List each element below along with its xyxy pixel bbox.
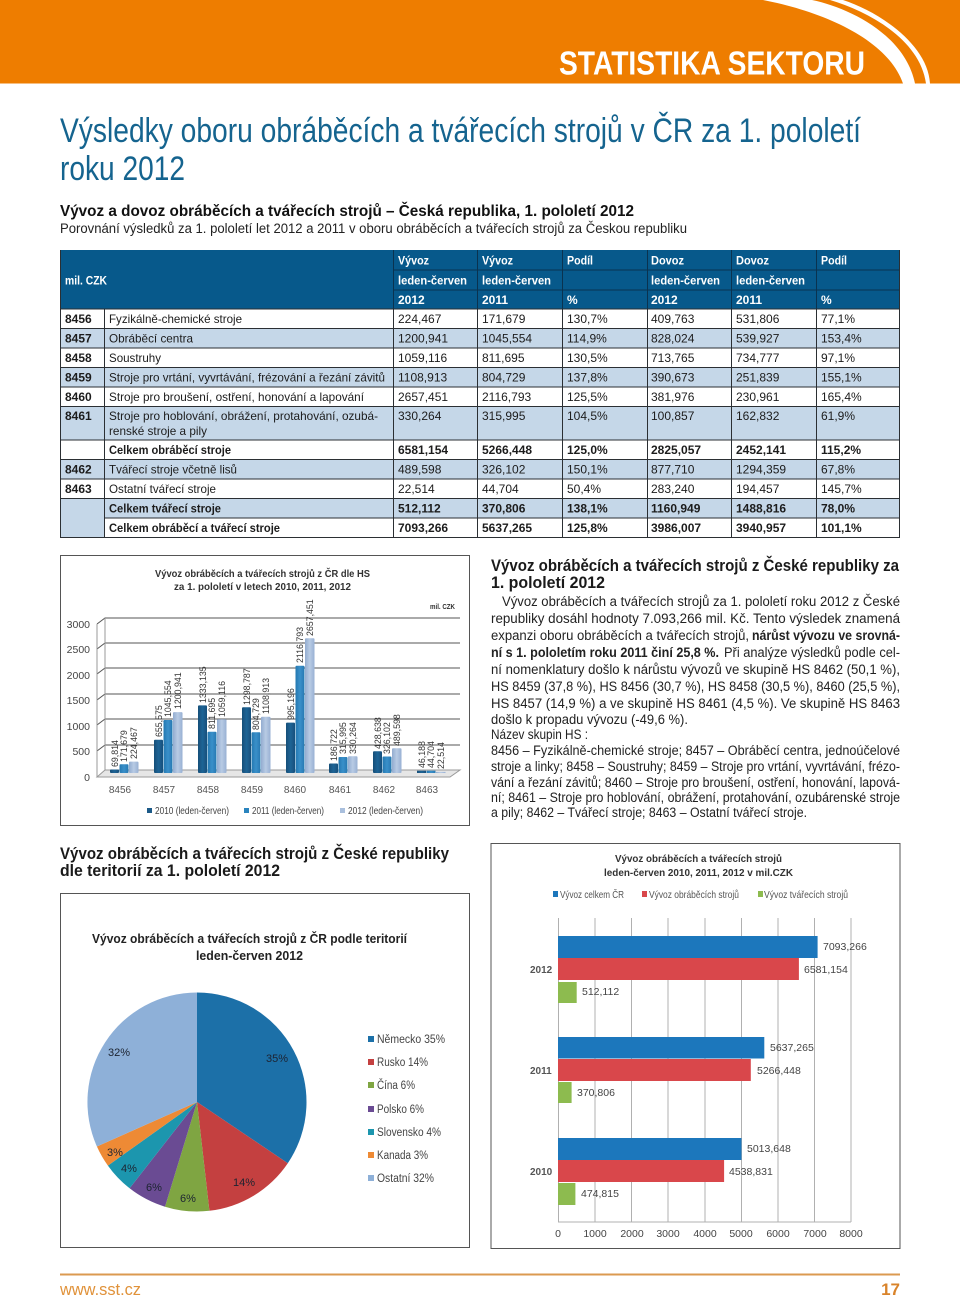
table header: 2011 xyxy=(482,293,508,307)
row 8463: 8463 xyxy=(65,482,92,496)
chart legend xyxy=(147,806,423,817)
pie title: leden-červen 2012 xyxy=(196,949,303,963)
pie legend: Německo 35% xyxy=(377,1034,445,1046)
row total machining: 6581,154 xyxy=(398,443,448,457)
article paragraph: Při analýze výsledků podle cel- xyxy=(724,645,900,660)
HS group names: a pily; 8462 – Tvářecí stroje; 8463 – Ostatní tvářecí stroje. xyxy=(491,805,807,820)
row 8458: 8458 xyxy=(65,351,92,365)
bar chart legend xyxy=(553,888,848,901)
table heading: Porovnání výsledků za 1. pololetí let 2012 a 2011 v oboru obráběcích a tvářecích strojů za Českou republiku xyxy=(60,221,687,236)
bar value labels: 995,196 xyxy=(286,688,296,720)
row 8462: 489,598 xyxy=(398,462,442,476)
row 8459 xyxy=(65,370,862,384)
bar chart title: Vývoz obráběcích a tvářecích strojů xyxy=(615,853,782,865)
table header: Dovoz xyxy=(651,254,684,268)
row 8461: Stroje pro hoblování, obrážení, protahování, ozubá- xyxy=(109,409,378,423)
row total forming: 1488,816 xyxy=(736,502,786,516)
table header: Dovoz xyxy=(736,254,769,268)
category labels: 8456 xyxy=(109,785,132,796)
row 8463: 22,514 xyxy=(398,482,435,496)
row 8458: 97,1% xyxy=(821,351,855,365)
row 8460: 230,961 xyxy=(736,390,780,404)
row 8461: 330,264 xyxy=(398,409,442,423)
bar value labels: 186,722 xyxy=(329,729,339,761)
row 8457: Obráběcí centra xyxy=(109,332,193,346)
row 8461: 104,5% xyxy=(567,409,608,423)
HS group names: 8456 – Fyzikálně-chemické stroje; 8457 – Obráběcí centra, jednoúčelové xyxy=(491,743,900,758)
table header: mil. CZK xyxy=(65,274,107,288)
row 8463: Ostatní tvářecí stroje xyxy=(109,482,216,496)
row total forming xyxy=(109,502,855,516)
bar values: 512,112 xyxy=(582,986,619,998)
row 8457 xyxy=(65,332,862,346)
bar values: 370,806 xyxy=(577,1087,615,1099)
x axis labels: 3000 xyxy=(656,1228,680,1240)
table header: Podíl xyxy=(567,254,593,268)
HS group names xyxy=(491,727,900,820)
HS group names: vání a řezání závitů; 8460 – Stroje pro broušení, ostření, honování, lapová- xyxy=(491,775,900,790)
table header: 2012 xyxy=(651,293,678,307)
data table xyxy=(60,250,900,538)
pie legend: Polsko 6% xyxy=(377,1104,424,1116)
row 8462: 150,1% xyxy=(567,462,608,476)
territory heading: Vývoz obráběcích a tvářecích strojů z České republiky xyxy=(60,844,450,863)
x axis labels: 6000 xyxy=(766,1228,790,1240)
gridlines and y axis: 1500 xyxy=(67,695,90,707)
table header: Vývoz xyxy=(482,254,513,268)
gridlines and y axis: 0 xyxy=(84,772,90,784)
bar value labels: 330,264 xyxy=(348,722,358,754)
bar value labels: 1298,787 xyxy=(242,668,252,705)
article paragraph: ní s 1. pololetím roku 2011 činí 25,8 %. xyxy=(491,645,719,660)
row grand total: 125,8% xyxy=(567,521,608,535)
x axis labels: 8000 xyxy=(839,1228,863,1240)
chart title xyxy=(155,567,455,611)
row 8463: 44,704 xyxy=(482,482,519,496)
row total forming: 512,112 xyxy=(398,502,441,516)
category labels: 8459 xyxy=(241,785,264,796)
table header: % xyxy=(821,293,832,307)
table header: leden-červen xyxy=(651,274,720,288)
row 8459: 1108,913 xyxy=(398,370,447,384)
row 8460: 125,5% xyxy=(567,390,608,404)
row 8459: 137,8% xyxy=(567,370,608,384)
row 8459: 390,673 xyxy=(651,370,695,384)
bar values: 4538,831 xyxy=(729,1166,773,1178)
footer: www.sst.cz xyxy=(59,1281,141,1299)
row grand total: Celkem obráběcí a tvářecí stroje xyxy=(109,521,280,535)
article paragraph: došlo k propadu vývozu (-49,6 %). xyxy=(491,712,688,727)
bar chart grid xyxy=(558,918,851,1222)
row total machining: 2825,057 xyxy=(651,443,701,457)
row 8458: 811,695 xyxy=(482,351,525,365)
row 8459: Stroje pro vrtání, vyvrtávání, frézování a řezání závitů xyxy=(109,370,385,384)
row total machining xyxy=(109,443,861,457)
pie labels: 35% xyxy=(266,1053,288,1065)
bar values: 5013,648 xyxy=(747,1143,791,1155)
table header: 2011 xyxy=(736,293,762,307)
table header: % xyxy=(567,293,578,307)
row 8460: 165,4% xyxy=(821,390,862,404)
pie labels: 14% xyxy=(233,1177,255,1189)
row 8463 xyxy=(65,482,862,496)
bar chart title: leden-červen 2010, 2011, 2012 v mil.CZK xyxy=(604,867,793,879)
row total machining: 2452,141 xyxy=(736,443,786,457)
pie labels: 6% xyxy=(180,1193,196,1205)
title xyxy=(60,112,861,188)
pie labels xyxy=(107,1047,288,1205)
category labels xyxy=(109,785,439,796)
row 8456: 171,679 xyxy=(482,312,526,326)
chart title: za 1. pololetí v letech 2010, 2011, 2012 xyxy=(174,581,351,593)
year labels xyxy=(530,965,553,1178)
table header: Podíl xyxy=(821,254,847,268)
row 8459: 8459 xyxy=(65,370,92,384)
category labels: 8457 xyxy=(153,785,176,796)
row backgrounds xyxy=(60,328,900,537)
x axis labels: 4000 xyxy=(693,1228,717,1240)
pie legend: Čína 6% xyxy=(377,1079,415,1092)
bar value labels: 171,679 xyxy=(119,730,129,762)
year labels: 2012 xyxy=(530,965,553,976)
article heading xyxy=(491,556,900,592)
territory heading xyxy=(60,844,450,880)
category labels: 8460 xyxy=(284,785,307,796)
pie labels: 32% xyxy=(108,1047,130,1059)
row 8457: 539,927 xyxy=(736,332,780,346)
row 8461: 100,857 xyxy=(651,409,695,423)
gridlines and y axis: 500 xyxy=(72,746,90,758)
HS group names: ní; 8461 – Stroje pro hoblování, obrážení, protahování, ozubárenské stroje xyxy=(491,790,900,805)
category labels: 8458 xyxy=(197,785,220,796)
column chart: export by HS xyxy=(60,556,470,826)
row total forming: 370,806 xyxy=(482,502,526,516)
pie legend: Slovensko 4% xyxy=(377,1127,441,1139)
article paragraph: republiky dosáhl hodnoty 7.093,266 mil. Kč. Tento výsledek znamená xyxy=(491,611,901,626)
row grand total: 3986,007 xyxy=(651,521,701,535)
row 8461 xyxy=(65,409,855,438)
row 8463: 194,457 xyxy=(736,482,780,496)
footer: 17 xyxy=(881,1280,900,1299)
gridlines and y axis xyxy=(67,618,460,784)
row 8462: 877,710 xyxy=(651,462,695,476)
gridlines and y axis: 3000 xyxy=(67,619,90,631)
row total forming: Celkem tvářecí stroje xyxy=(109,502,221,516)
bar chart legend: Vývoz celkem ČR xyxy=(560,888,624,901)
bar values: 5637,265 xyxy=(770,1042,814,1054)
pie labels: 3% xyxy=(107,1147,123,1159)
article paragraph: HS 8459 (37,8 %), HS 8456 (30,7 %), HS 8458 (30,5 %), 8460 (25,5 %), xyxy=(491,679,900,694)
pie legend: Ostatní 32% xyxy=(377,1173,434,1185)
x axis labels: 2000 xyxy=(620,1228,644,1240)
row total forming: 138,1% xyxy=(567,502,608,516)
row total machining: Celkem obráběcí stroje xyxy=(109,443,231,457)
bar values: 474,815 xyxy=(581,1188,619,1200)
year labels: 2011 xyxy=(530,1066,552,1077)
bar values: 7093,266 xyxy=(823,941,867,953)
row 8462: 67,8% xyxy=(821,462,855,476)
footer xyxy=(59,1274,900,1299)
row 8457: 114,9% xyxy=(567,332,607,346)
bar chart legend: Vývoz obráběcích strojů xyxy=(649,889,739,901)
x axis labels: 5000 xyxy=(729,1228,753,1240)
table header: leden-červen xyxy=(482,274,551,288)
row total forming: 1160,949 xyxy=(651,502,701,516)
row 8457: 1200,941 xyxy=(398,332,448,346)
horizontal bar chart: export totals xyxy=(491,844,900,1248)
row total machining: 125,0% xyxy=(567,443,608,457)
row grand total: 7093,266 xyxy=(398,521,448,535)
bar chart title xyxy=(604,853,793,879)
bar value labels: 1045,554 xyxy=(163,680,173,717)
row 8458: Soustruhy xyxy=(109,351,161,365)
row 8457: 1045,554 xyxy=(482,332,532,346)
bar value labels: 2657,451 xyxy=(305,599,315,636)
row 8460: 8460 xyxy=(65,390,92,404)
row 8456: 130,7% xyxy=(567,312,608,326)
pie labels: 4% xyxy=(121,1163,137,1175)
row 8456: 77,1% xyxy=(821,312,855,326)
row 8461: renské stroje a pily xyxy=(109,424,207,438)
category labels: 8462 xyxy=(373,785,396,796)
row 8458: 1059,116 xyxy=(398,351,447,365)
table header: leden-červen xyxy=(736,274,805,288)
row 8463: 283,240 xyxy=(651,482,695,496)
x axis labels: 7000 xyxy=(803,1228,827,1240)
row total machining: 5266,448 xyxy=(482,443,532,457)
bar values: 6581,154 xyxy=(804,964,848,976)
pie legend: Kanada 3% xyxy=(377,1150,428,1162)
pie title: Vývoz obráběcích a tvářecích strojů z ČR podle teritorií xyxy=(92,931,407,946)
table heading: Vývoz a dovoz obráběcích a tvářecích strojů – Česká republika, 1. pololetí 2012 xyxy=(60,202,634,220)
row 8462: 1294,359 xyxy=(736,462,786,476)
bar value labels: 428,638 xyxy=(373,717,383,749)
row grand total: 5637,265 xyxy=(482,521,532,535)
bar value labels: 326,102 xyxy=(382,722,392,754)
article heading: Vývoz obráběcích a tvářecích strojů z České republiky za xyxy=(491,556,900,575)
article paragraph: Vývoz obráběcích a tvářecích strojů za 1. pololetí roku 2012 z České xyxy=(502,594,900,609)
pie legend: Rusko 14% xyxy=(377,1057,428,1069)
horizontal bars xyxy=(558,936,818,1205)
article paragraph: HS 8457 (14,9 %) a ve skupině HS 8461 (4,5 %). Ve skupině HS 8463 xyxy=(491,696,900,711)
territory heading: dle teritorií za 1. pololetí 2012 xyxy=(60,862,280,880)
chart legend: 2012 (leden-červen) xyxy=(348,806,423,817)
gridlines and y axis: 1000 xyxy=(67,721,90,733)
row 8459: 155,1% xyxy=(821,370,862,384)
row 8458: 713,765 xyxy=(651,351,695,365)
row total forming: 78,0% xyxy=(821,502,855,516)
bar value labels: 22,514 xyxy=(436,742,446,769)
row 8457: 8457 xyxy=(65,332,92,346)
row 8458: 130,5% xyxy=(567,351,608,365)
row 8456: 224,467 xyxy=(398,312,442,326)
row total machining: 115,2% xyxy=(821,443,861,457)
pie labels: 6% xyxy=(146,1182,162,1194)
row 8460: Stroje pro broušení, ostření, honování a lapování xyxy=(109,390,365,404)
bar value labels xyxy=(110,599,446,769)
x axis labels: 0 xyxy=(555,1228,561,1240)
bar value labels: 44,704 xyxy=(426,741,436,768)
table heading xyxy=(60,202,687,236)
row 8456: 531,806 xyxy=(736,312,780,326)
table header: leden-červen xyxy=(398,274,467,288)
row 8462: 8462 xyxy=(65,462,92,476)
article paragraph: ní nomenklatury došlo k nárůstu vývozů ve skupině HS 8462 (50,1 %), xyxy=(491,662,900,677)
bar value labels: 224,467 xyxy=(129,727,139,759)
table header: 2012 xyxy=(398,293,425,307)
x axis labels xyxy=(555,1228,863,1240)
bar value labels: 1200,941 xyxy=(173,672,183,709)
bar value labels: 1059,116 xyxy=(217,681,227,717)
article paragraph: expanzi oboru obráběcích a tvářecích strojů, xyxy=(491,628,749,643)
category labels: 8461 xyxy=(329,785,352,796)
row 8461: 162,832 xyxy=(736,409,780,423)
bar value labels: 2116,793 xyxy=(295,627,305,663)
article text xyxy=(491,556,901,820)
bars xyxy=(110,638,446,773)
row 8460: 2657,451 xyxy=(398,390,448,404)
row 8463: 50,4% xyxy=(567,482,601,496)
row 8461: 61,9% xyxy=(821,409,855,423)
row grand total xyxy=(109,521,862,535)
bar value labels: 46,188 xyxy=(417,741,427,768)
x axis labels: 1000 xyxy=(583,1228,607,1240)
row 8456 xyxy=(65,312,855,326)
bar values: 5266,448 xyxy=(757,1065,801,1077)
gridlines and y axis: 2000 xyxy=(67,670,90,682)
row grand total: 101,1% xyxy=(821,521,862,535)
pie title xyxy=(92,931,407,963)
row 8457: 828,024 xyxy=(651,332,695,346)
bar value labels: 1108,913 xyxy=(261,678,271,714)
chart title: mil. CZK xyxy=(430,602,455,611)
category labels: 8463 xyxy=(416,785,439,796)
bar value labels: 315,995 xyxy=(338,722,348,754)
header band: STATISTIKA SEKTORU xyxy=(559,44,865,82)
bar value labels: 811,695 xyxy=(207,698,217,729)
HS group names: stroje a linky; 8458 – Soustruhy; 8459 – Stroje pro vrtání, vyvrtávání, frézo- xyxy=(491,759,900,774)
bar value labels: 489,598 xyxy=(392,714,402,746)
pie chart: export by territory xyxy=(60,894,470,1248)
bar value labels: 655,575 xyxy=(154,705,164,737)
table header: Vývoz xyxy=(398,254,429,268)
article paragraph: nárůst vývozu ve srovná- xyxy=(752,628,900,643)
row 8460: 381,976 xyxy=(651,390,695,404)
bar value labels: 1333,135 xyxy=(198,666,208,703)
header band xyxy=(0,0,960,84)
row 8458 xyxy=(65,351,855,365)
row 8460: 2116,793 xyxy=(482,390,531,404)
chart legend: 2011 (leden-červen) xyxy=(252,806,324,817)
row 8459: 804,729 xyxy=(482,370,526,384)
row 8457: 153,4% xyxy=(821,332,862,346)
row 8462: Tvářecí stroje včetně lisů xyxy=(109,462,237,476)
chart title: Vývoz obráběcích a tvářecích strojů z ČR dle HS xyxy=(155,567,370,580)
row 8456: Fyzikálně-chemické stroje xyxy=(109,312,242,326)
article paragraph xyxy=(491,594,901,727)
bar values xyxy=(577,941,867,1200)
row 8458: 734,777 xyxy=(736,351,780,365)
bar value labels: 804,729 xyxy=(251,698,261,730)
row 8460 xyxy=(65,390,862,404)
pie slices xyxy=(87,992,306,1211)
row 8461: 8461 xyxy=(65,409,92,423)
row grand total: 3940,957 xyxy=(736,521,786,535)
chart legend: 2010 (leden-červen) xyxy=(155,806,229,817)
table header xyxy=(60,250,900,309)
row 8462: 326,102 xyxy=(482,462,526,476)
row 8461: 315,995 xyxy=(482,409,526,423)
bar value labels: 69,814 xyxy=(110,740,120,767)
year labels: 2010 xyxy=(530,1167,553,1178)
row 8456: 8456 xyxy=(65,312,92,326)
article heading: 1. pololetí 2012 xyxy=(491,574,605,592)
row 8459: 251,839 xyxy=(736,370,780,384)
HS group names: Název skupin HS : xyxy=(491,727,588,742)
gridlines and y axis: 2500 xyxy=(67,644,90,656)
row 8456: 409,763 xyxy=(651,312,695,326)
pie legend xyxy=(368,1034,445,1185)
bar chart legend: Vývoz tvářecích strojů xyxy=(764,889,848,901)
title: roku 2012 xyxy=(60,150,185,188)
row 8462 xyxy=(65,462,855,476)
row 8463: 145,7% xyxy=(821,482,862,496)
